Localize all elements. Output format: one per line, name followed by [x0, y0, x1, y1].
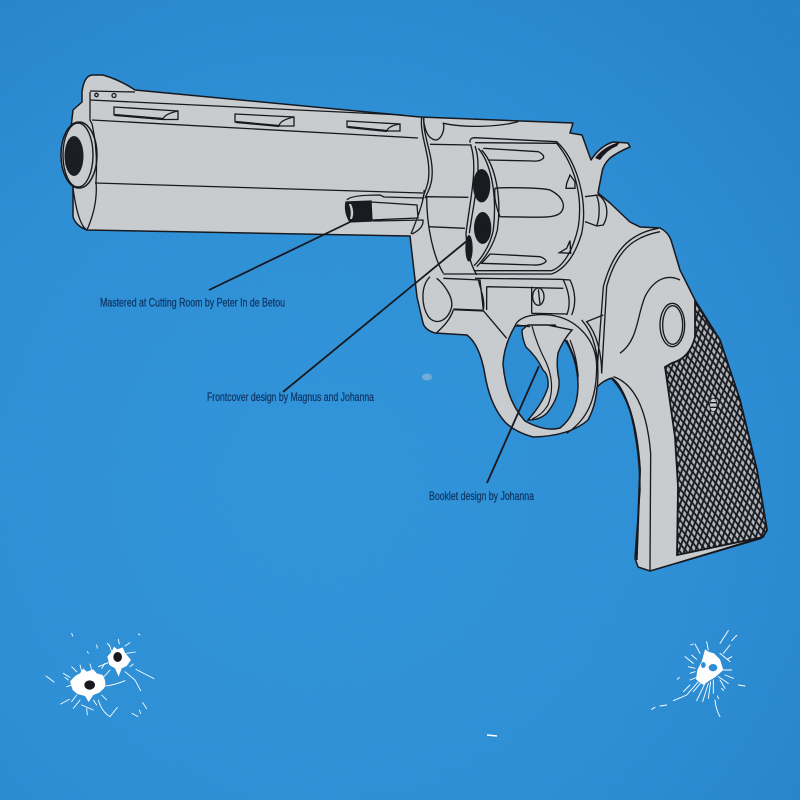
credit: booklet: Booklet design by Johanna	[429, 489, 534, 503]
lower frame	[443, 278, 575, 315]
frame and cylinder	[421, 117, 660, 433]
ejector rod	[346, 190, 424, 234]
leader line: mastered	[209, 222, 350, 290]
specks	[422, 374, 497, 736]
flutes	[483, 148, 544, 161]
grip details	[612, 277, 762, 570]
credit: frontcover: Frontcover design by Magnus and Johanna	[207, 390, 374, 404]
crane pin	[585, 195, 607, 226]
muzzle	[61, 122, 97, 188]
trigger guard opening	[503, 325, 578, 429]
cylinder window	[443, 138, 584, 274]
bullet hole right	[652, 631, 745, 717]
barrel details	[73, 91, 423, 230]
grip front lines	[597, 228, 660, 373]
guard lines	[515, 315, 603, 433]
leader line: booklet	[487, 366, 539, 483]
credit: mastered: Mastered at Cutting Room by Peter In de Betou	[100, 296, 285, 310]
leader line: frontcover	[283, 240, 468, 392]
bullet holes left	[46, 633, 154, 717]
cylinder chambers	[465, 169, 491, 262]
revolver	[61, 75, 767, 571]
hammer spur shadow	[595, 142, 620, 160]
trigger	[522, 325, 572, 420]
sight grooves	[114, 107, 178, 120]
gun silhouette	[68, 75, 767, 571]
grip panel	[665, 302, 767, 555]
